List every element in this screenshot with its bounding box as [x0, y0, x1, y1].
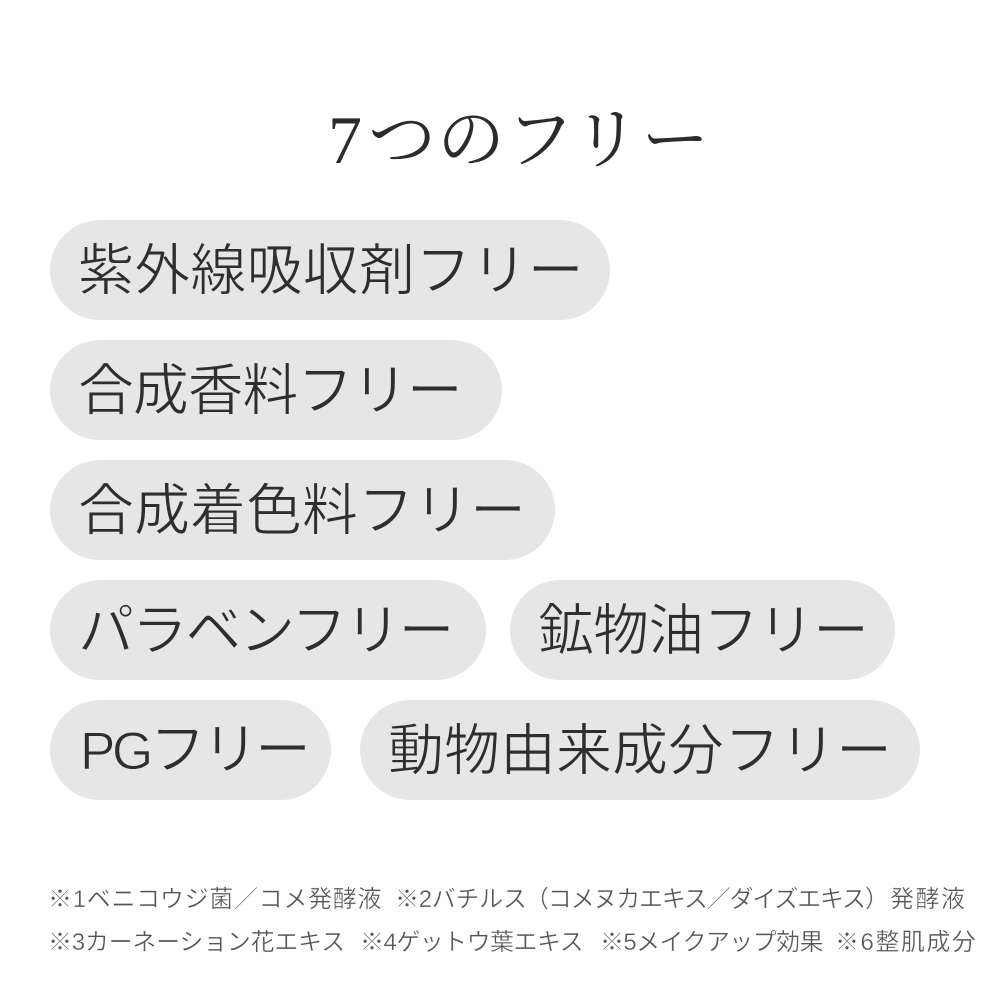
pill: 紫外線吸収剤フリー: [50, 220, 610, 320]
footnote line 1: [48, 886, 966, 913]
pill: PGフリー: PGフリー: [80, 718, 308, 781]
footnote line 2: ※4ゲットウ葉エキス: [360, 929, 583, 956]
footnote line 2: [48, 929, 977, 956]
pill: 鉱物油フリー: 鉱物油フリー: [538, 599, 868, 662]
footnote line 2: ※6整肌成分: [835, 929, 977, 956]
pill: 合成香料フリー: 合成香料フリー: [78, 359, 462, 422]
pill: 動物由来成分フリー: 動物由来成分フリー: [388, 719, 892, 782]
footnote line 2: ※5メイクアップ効果: [600, 929, 823, 956]
pill: パラベンフリー: パラベンフリー: [78, 599, 452, 662]
pill: 紫外線吸収剤フリー: 紫外線吸収剤フリー: [78, 239, 584, 302]
pill: 鉱物油フリー: [510, 580, 895, 680]
title: 7つのフリー: [328, 102, 710, 178]
footnote line 1: （コメヌカエキス／ダイズエキス）: [525, 886, 888, 913]
footnote line 1: ※2バチルス: [395, 886, 527, 913]
footnote line 1: ※1ベニコウジ菌／コメ発酵液: [48, 886, 382, 913]
footnote line 1: 発酵液: [890, 886, 966, 913]
pill: 合成着色料フリー: [50, 460, 555, 560]
footnote line 2: ※3カーネーション花エキス: [48, 929, 345, 956]
pill: 合成着色料フリー: 合成着色料フリー: [78, 479, 526, 542]
pill: 動物由来成分フリー: [360, 700, 920, 800]
pill: 合成香料フリー: [50, 340, 502, 440]
pill: PGフリー: [50, 700, 331, 800]
pill: パラベンフリー: [50, 580, 486, 680]
